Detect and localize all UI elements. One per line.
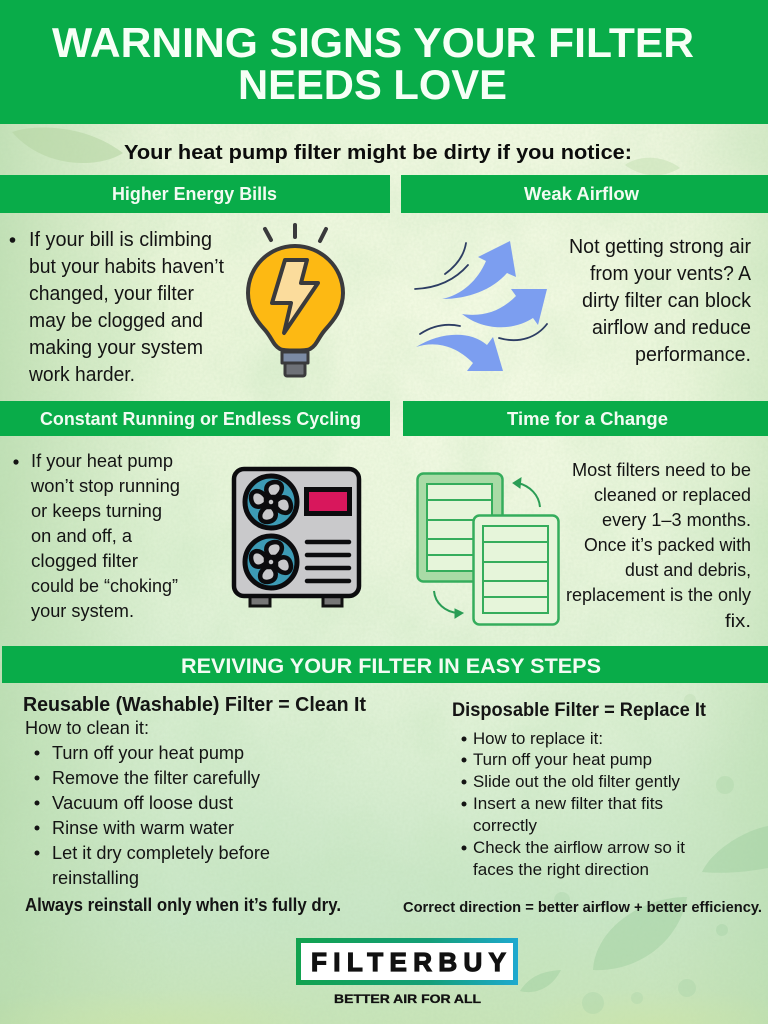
cleaning steps list: Rinse with warm water — [52, 818, 234, 838]
fan bottom — [245, 536, 297, 588]
cleaning steps list: Vacuum off loose dust — [52, 793, 233, 813]
bulleted text: energy bills: may be clogged and — [29, 310, 203, 332]
text: time for a change: fix. — [725, 611, 751, 631]
title banner: WARNING SIGNS YOUR FILTER — [52, 19, 694, 66]
logo: Filterbuy: FILTERBUY — [311, 947, 506, 977]
heading bar: weak airflow: Weak Airflow — [524, 183, 640, 204]
text: time for a change: every 1–3 months. — [602, 510, 751, 530]
bulleted text: constant running: could be “choking” — [31, 576, 178, 596]
text: weak airflow — [569, 236, 752, 366]
heading bar: constant running — [0, 401, 390, 436]
panel: constant running — [0, 401, 390, 621]
heading bar: time for a change: Time for a Change — [507, 408, 668, 429]
replacement steps list: Turn off your heat pump — [473, 751, 652, 769]
replacement steps list: Insert a new filter that fits — [473, 795, 663, 813]
bulleted text: constant running — [13, 451, 180, 621]
replacement steps list — [462, 730, 685, 879]
cleaning steps list — [25, 718, 270, 888]
bulleted text: constant running: won’t stop running — [30, 476, 180, 496]
heading bar: constant running: Constant Running or Endless Cycling — [40, 408, 361, 429]
replacement steps list: faces the right direction — [473, 861, 649, 879]
panel: weak airflow — [401, 175, 768, 371]
cleaning steps list: Turn off your heat pump — [52, 743, 244, 763]
column: disposable filter — [403, 700, 762, 916]
title banner: NEEDS LOVE — [238, 61, 507, 108]
text: weak airflow: performance. — [635, 344, 751, 366]
text: time for a change — [566, 460, 751, 631]
text: time for a change: Most filters need to be — [572, 460, 751, 480]
title banner — [0, 0, 768, 124]
heading bar: time for a change — [403, 401, 768, 436]
note: correct direction: Correct direction = better airflow + better efficiency. — [403, 899, 762, 916]
text: weak airflow: dirty filter can block — [582, 290, 752, 312]
panel: higher energy bills — [0, 175, 390, 386]
heading bar: higher energy bills: Higher Energy Bills — [112, 183, 277, 204]
heading: disposable filter: Disposable Filter = Replace It — [452, 700, 707, 721]
bulleted text: energy bills: making your system — [29, 337, 203, 359]
note: reinstall when dry: Always reinstall only when it’s fully dry. — [25, 895, 341, 915]
heading: reusable filter: Reusable (Washable) Filter = Clean It — [23, 694, 366, 716]
text: time for a change: cleaned or replaced — [594, 485, 751, 505]
text: time for a change: dust and debris, — [625, 560, 751, 580]
section banner: reviving your filter — [2, 646, 768, 683]
text: time for a change: Once it’s packed with — [584, 535, 751, 555]
column: reusable filter — [23, 694, 366, 915]
icon: heat pump unit — [234, 469, 359, 606]
cleaning steps list: Remove the filter carefully — [52, 768, 260, 788]
fan top — [245, 476, 297, 528]
cleaning steps list: How to clean it: — [25, 718, 149, 738]
bulleted text: energy bills: work harder. — [28, 364, 135, 386]
bulleted text: constant running: clogged filter — [31, 551, 138, 571]
replacement steps list: correctly — [473, 817, 538, 835]
heading bar: higher energy bills — [0, 175, 390, 213]
bulleted text: energy bills: changed, your filter — [29, 283, 194, 305]
text: time for a change: replacement is the only — [566, 585, 751, 605]
replacement steps list: Slide out the old filter gently — [473, 773, 681, 791]
text: weak airflow: airflow and reduce — [592, 317, 751, 339]
replacement steps list: Check the airflow arrow so it — [473, 839, 685, 857]
subheading: Your heat pump filter might be dirty if you notice: — [124, 142, 632, 164]
heading bar: weak airflow — [401, 175, 768, 213]
bulleted text: constant running: or keeps turning — [31, 501, 162, 521]
logo: Filterbuy — [296, 938, 518, 1006]
bulleted text: constant running: your system. — [31, 601, 134, 621]
bulleted text: constant running: If your heat pump — [31, 451, 173, 471]
text: weak airflow: Not getting strong air — [569, 236, 751, 258]
bulleted text: energy bills — [10, 229, 224, 386]
icon: airflow arrows — [415, 241, 547, 371]
panel: time for a change — [403, 401, 768, 631]
bulleted text: energy bills: but your habits haven’t — [29, 256, 224, 278]
cleaning steps list: reinstalling — [52, 868, 139, 888]
logo: Filterbuy: BETTER AIR FOR ALL — [334, 992, 481, 1006]
section banner: reviving your filter: REVIVING YOUR FILTER IN EASY STEPS — [181, 655, 601, 678]
bulleted text: energy bills: If your bill is climbing — [29, 229, 212, 251]
cleaning steps list: Let it dry completely before — [52, 843, 270, 863]
replacement steps list: How to replace it: — [473, 730, 603, 748]
icon: light bulb — [248, 225, 343, 376]
icon: filter swap — [418, 474, 558, 624]
text: weak airflow: from your vents? A — [590, 263, 752, 285]
bulleted text: constant running: on and off, a — [31, 526, 133, 546]
